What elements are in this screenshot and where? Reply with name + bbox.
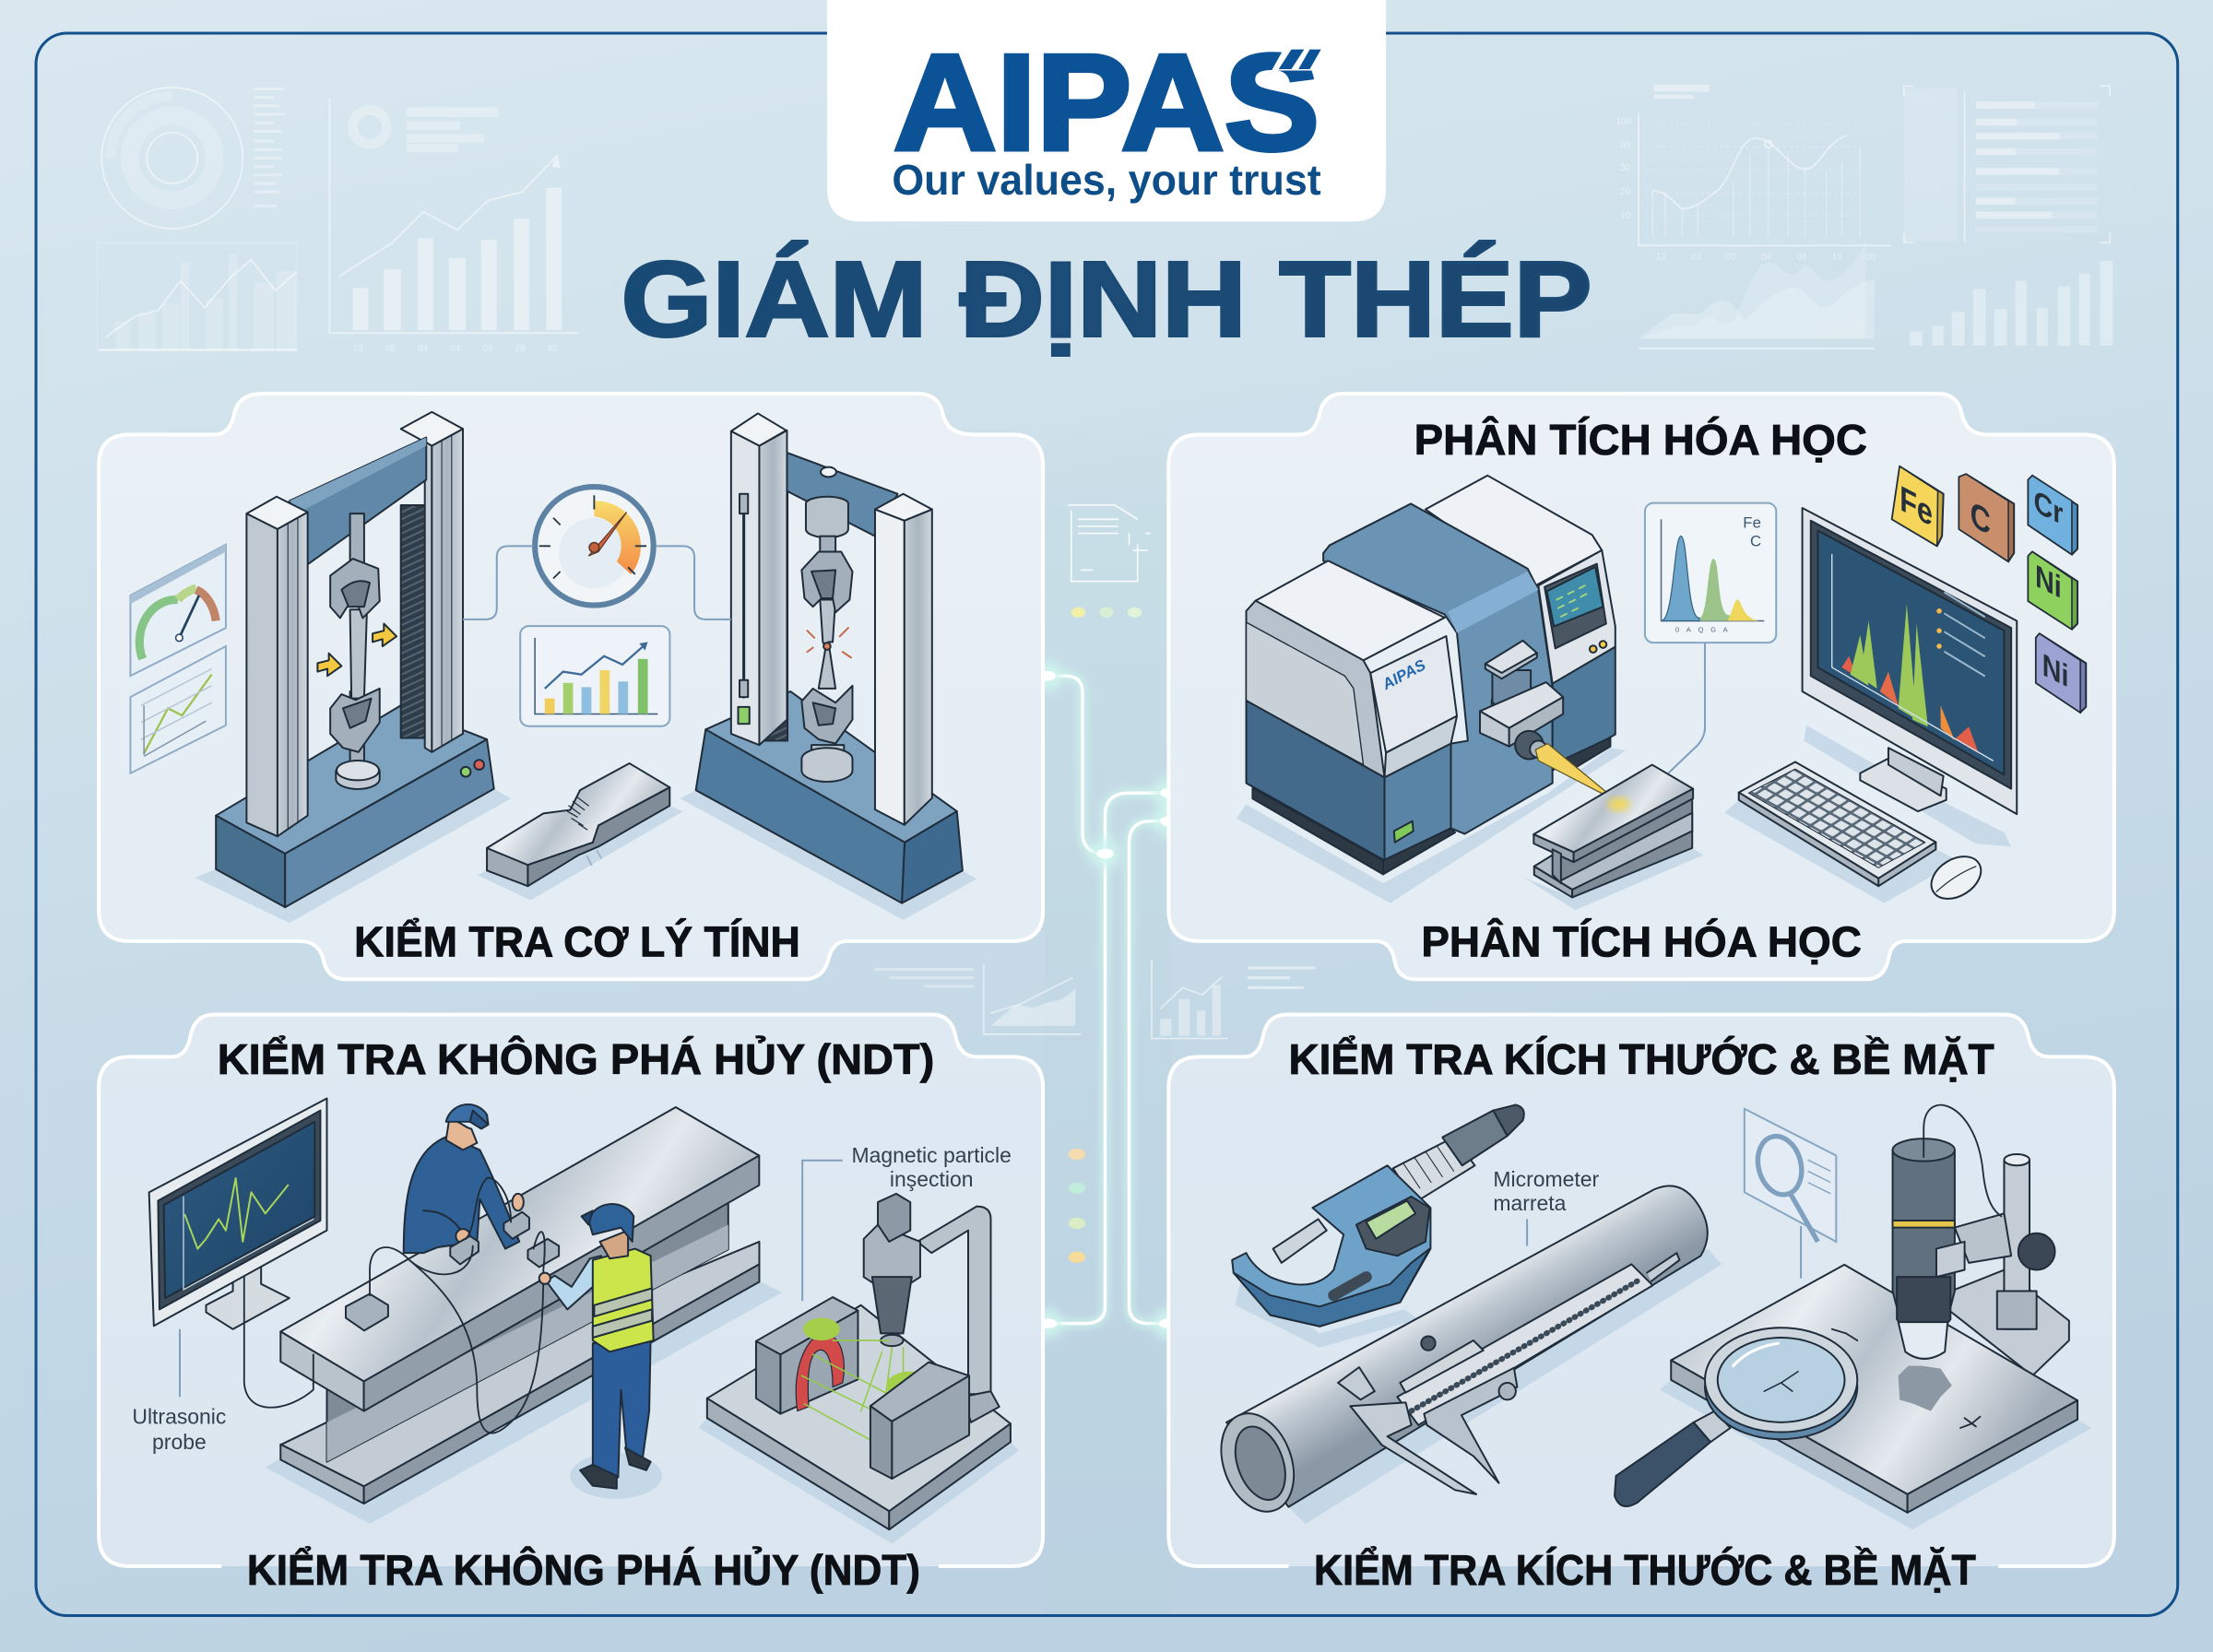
ground shadows (1237, 726, 2011, 910)
magnifying glass (1615, 1328, 1857, 1506)
logo wordmark: AIPAS (893, 27, 1320, 179)
line chart: 30 (1620, 163, 1631, 173)
magnetic particle label line 2: inşection (890, 1167, 973, 1191)
tile Ni green: Ni (2035, 557, 2062, 606)
spectrum card: C (1750, 532, 1761, 549)
steel sample (1533, 765, 1693, 897)
line chart: 100 (1616, 117, 1632, 127)
heading bottom: KIỂM TRA KHÔNG PHÁ HỦY (NDT) (247, 1546, 920, 1594)
line chart: 80 (1620, 141, 1631, 151)
spectrum card: 0AQGA (1675, 626, 1734, 634)
tile Fe: Fe (1899, 478, 1933, 535)
tile Ni purple (2036, 633, 2086, 713)
broken specimen (487, 763, 669, 886)
big bar chart: 08 (385, 344, 396, 354)
tile Ni purple: Ni (2042, 646, 2068, 694)
heading top: PHÂN TÍCH HÓA HỌC (1414, 416, 1867, 464)
bar chart (1910, 261, 2112, 346)
caliper (1338, 1253, 1679, 1494)
mini chart left (875, 963, 1081, 1034)
heading bottom: PHÂN TÍCH HÓA HỌC (1421, 918, 1862, 966)
probes (346, 1212, 559, 1330)
line chart (1616, 85, 1891, 263)
document icon (1069, 505, 1150, 582)
inspection plate (1671, 1265, 2077, 1513)
title: GIÁM ĐỊNH THÉP (621, 239, 1592, 359)
line chart: 19 (1832, 253, 1842, 263)
tile C (1959, 474, 2014, 561)
panel: non-destructive testing (99, 1014, 1043, 1594)
left tensile machine (216, 412, 494, 907)
spectrum card: Fe (1743, 513, 1761, 531)
ring dial (101, 88, 285, 229)
background charts centre (875, 505, 1316, 1263)
line card (130, 646, 226, 773)
status dots bottom (1069, 1149, 1085, 1263)
panel: mechanical testing (99, 394, 1043, 979)
background charts right (1616, 85, 2112, 348)
microscope cable (1923, 1105, 2001, 1216)
crack mark (1899, 1366, 1952, 1411)
dial gauge (535, 487, 654, 606)
tile Cr (2028, 476, 2077, 555)
right tensile machine (696, 413, 963, 903)
connector lines (463, 546, 731, 620)
line chart: 03 (1691, 253, 1701, 263)
area chart (1639, 239, 1875, 348)
micrometer label: Micrometer (1493, 1167, 1600, 1191)
ground shadows (1235, 1249, 2091, 1529)
tile Fe (1892, 466, 1944, 546)
big bar chart: 04 (418, 344, 429, 354)
central channel tint (1045, 423, 1171, 1616)
monitor (149, 1099, 326, 1329)
line chart: 08 (1796, 253, 1807, 263)
computer monitor (1803, 508, 2017, 814)
line chart: 10 (1620, 211, 1631, 221)
spectrum card (1645, 503, 1776, 643)
heading top: KIỂM TRA KHÔNG PHÁ HỦY (NDT) (218, 1035, 934, 1083)
gauge card (130, 545, 226, 676)
logo on machine: AIPAS (1379, 655, 1429, 693)
ground shadows (266, 1281, 1019, 1543)
microscope (1893, 1139, 2055, 1359)
logo plate (827, 0, 1386, 221)
line chart: 13 (1655, 253, 1666, 263)
tile C: C (1970, 493, 1991, 543)
status dots top (1071, 608, 1142, 618)
panel: chemical analysis (1168, 394, 2114, 979)
tile Cr: Cr (2034, 482, 2064, 532)
magnetic particle label: Magnetic particle (852, 1143, 1012, 1167)
background charts left (98, 88, 579, 354)
magnetic particle apparatus (707, 1194, 1011, 1529)
micrometer (1232, 1104, 1524, 1327)
mouse (1923, 848, 1989, 907)
small bar chart (520, 626, 669, 726)
mini chart right (1152, 960, 1316, 1039)
small line chart (98, 242, 298, 350)
element tiles (1892, 466, 2086, 713)
logo tagline: Our values, your trust (892, 156, 1321, 204)
big bar chart: 28 (515, 344, 526, 354)
heading: KIỂM TRA CƠ LÝ TÍNH (354, 918, 800, 966)
line chart: 20 (1620, 187, 1631, 197)
micrometer label line 2: marreta (1493, 1191, 1567, 1215)
big bar chart: 04 (450, 344, 461, 354)
steel I-beam (280, 1107, 759, 1504)
ultrasonic probe label line 2: probe (152, 1430, 207, 1454)
spectrometer (1247, 476, 1615, 874)
line chart: 04 (1761, 253, 1772, 263)
heading top: KIỂM TRA KÍCH THƯỚC & BỀ MẶT (1288, 1035, 1994, 1083)
worker right (539, 1204, 654, 1489)
tile Ni green (2028, 551, 2077, 630)
cables (244, 1178, 545, 1434)
big bar chart: 09 (482, 344, 493, 354)
data panel (1904, 86, 2110, 242)
worker left (404, 1104, 524, 1253)
big bar chart: 80 (548, 344, 558, 354)
big bar chart: 13 (353, 344, 363, 354)
steel pipe (1208, 1186, 1708, 1522)
keyboard (1739, 762, 1935, 886)
magnifier card (1745, 1109, 1836, 1242)
connector line (1668, 642, 1705, 773)
laser beam (1535, 744, 1618, 802)
heading bottom: KIỂM TRA KÍCH THƯỚC & BỀ MẶT (1314, 1546, 1976, 1594)
ground shadows (195, 789, 976, 923)
line chart: 00 (1865, 253, 1876, 263)
connector circuit lines (1032, 660, 1184, 1339)
line chart: 03 (1726, 253, 1736, 263)
ultrasonic probe label: Ultrasonic (132, 1404, 226, 1428)
big bar chart (329, 99, 579, 354)
logo ticks (1272, 45, 1327, 71)
panel: dimension and surface inspection (1168, 1014, 2114, 1594)
